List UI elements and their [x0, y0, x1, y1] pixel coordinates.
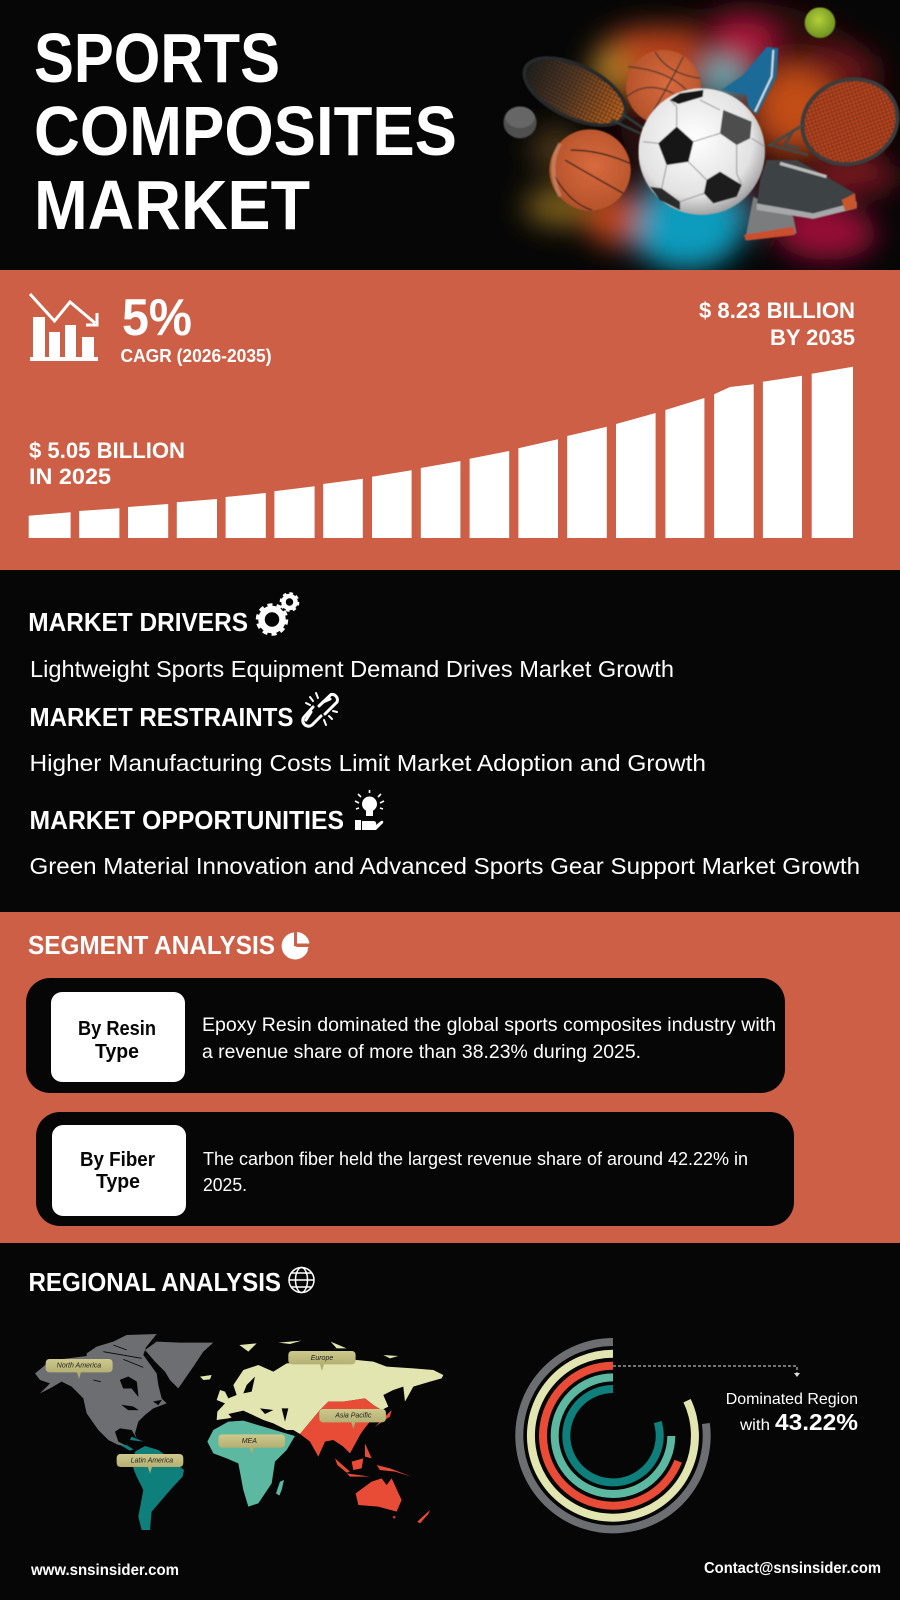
label: Europe: Europe: [311, 1355, 333, 1362]
icon: chart with falling arrow: [30, 294, 98, 361]
heading: market opportunities: MARKET OPPORTUNITIES: [30, 805, 344, 835]
hero image: sports equipment explosion: [503, 3, 900, 270]
callout: dominated region: with: [739, 1417, 770, 1434]
card: by resin type: By Resin: [78, 1018, 156, 1040]
heading: segment analysis: SEGMENT ANALYSIS: [28, 930, 275, 960]
label: MEA: MEA: [242, 1438, 257, 1445]
title: MARKET: [34, 166, 310, 244]
icon: gears: [258, 593, 298, 634]
callout: dominated region: 43.22%: [775, 1409, 858, 1435]
label: Latin America: Latin America: [131, 1458, 173, 1465]
dashed connector arrow: [613, 1366, 800, 1377]
right racket: [766, 76, 900, 167]
label: MEA: [218, 1434, 285, 1454]
label: Latin America: [117, 1454, 183, 1474]
region: Middle East and Africa: [207, 1421, 295, 1507]
2025 value: IN 2025: [29, 464, 111, 489]
blue shoe: [722, 47, 778, 115]
callout: dominated region: [726, 1391, 858, 1435]
inland seas: [228, 1377, 288, 1427]
icon: light bulb in hand: [355, 790, 384, 830]
text: opportunity: Green Material Innovation and Advanced Sports Gear Support Market Growth: [30, 853, 860, 879]
panel: market drivers, restraints, opportunities: [28, 593, 860, 879]
region: Latin America: [120, 1437, 184, 1530]
icon: globe: [289, 1268, 314, 1292]
top basketball: [626, 50, 701, 125]
heading: market drivers: MARKET DRIVERS: [28, 607, 248, 637]
card: by resin type: [26, 978, 785, 1093]
card: by resin type: a revenue share of more than 38.23% during 2025.: [202, 1041, 641, 1063]
tennis ball: [805, 7, 835, 38]
heading: regional analysis: REGIONAL ANALYSIS: [28, 1267, 281, 1297]
card: by fiber type: By Fiber: [80, 1149, 155, 1171]
region: Europe and Russia: [200, 1341, 443, 1434]
card: by fiber type: Type: [96, 1171, 140, 1193]
label: Asia Pacific: [319, 1409, 386, 1429]
2025 value: [29, 438, 185, 489]
card: by fiber type: 2025.: [203, 1175, 247, 1195]
CAGR value: 5%: [122, 289, 192, 347]
card: by fiber type: [36, 1112, 794, 1226]
left racket: [522, 56, 644, 135]
panel: market size: [0, 270, 900, 570]
label: Europe: [288, 1351, 356, 1371]
lakes and arctic channels: [93, 1345, 162, 1410]
map west: the Americas: [35, 1334, 213, 1530]
title: [34, 19, 457, 244]
2025 value: $ 5.05 BILLION: [29, 438, 185, 463]
bar chart: [29, 367, 853, 538]
card: by resin type: Epoxy Resin dominated the global sports composites industry with: [202, 1014, 776, 1036]
footer: contact: Contact@snsinsider.com: [704, 1560, 881, 1577]
lower basketball: [549, 129, 631, 211]
label: Asia Pacific: Asia Pacific: [334, 1413, 372, 1420]
text: driver: Lightweight Sports Equipment Demand Drives Market Growth: [30, 656, 674, 682]
callout: dominated region: Dominated Region: [726, 1391, 858, 1408]
label: North America: [46, 1359, 113, 1379]
panel: segment analysis: [0, 912, 900, 1243]
2035 value: BY 2035: [770, 325, 855, 350]
card: by fiber type: The carbon fiber held the largest revenue share of around 42.22% in: [203, 1149, 748, 1169]
icon: broken chain: [303, 693, 337, 726]
map east: Europe, Asia, Africa, Oceania: [200, 1341, 443, 1523]
card: by resin type: Type: [95, 1041, 139, 1063]
puck: [503, 106, 537, 138]
2035 value: $ 8.23 BILLION: [699, 298, 855, 323]
heading: market restraints: MARKET RESTRAINTS: [30, 702, 294, 732]
title: COMPOSITES: [34, 92, 457, 170]
title: SPORTS: [34, 19, 280, 97]
text: restraint: Higher Manufacturing Costs Limit Market Adoption and Growth: [30, 750, 706, 776]
icon: pie chart: [282, 932, 310, 959]
label: North America: North America: [57, 1363, 101, 1370]
2035 value: [699, 298, 855, 350]
footer: website: www.snsinsider.com: [30, 1562, 179, 1579]
world map: [35, 1334, 443, 1530]
region: North America: [35, 1334, 213, 1445]
grey shoe: [743, 160, 857, 241]
soccer ball: [638, 88, 765, 215]
region: Asia Pacific: [300, 1398, 430, 1523]
radial bar chart: [519, 1342, 707, 1529]
CAGR label: CAGR (2026-2035): [120, 346, 272, 366]
